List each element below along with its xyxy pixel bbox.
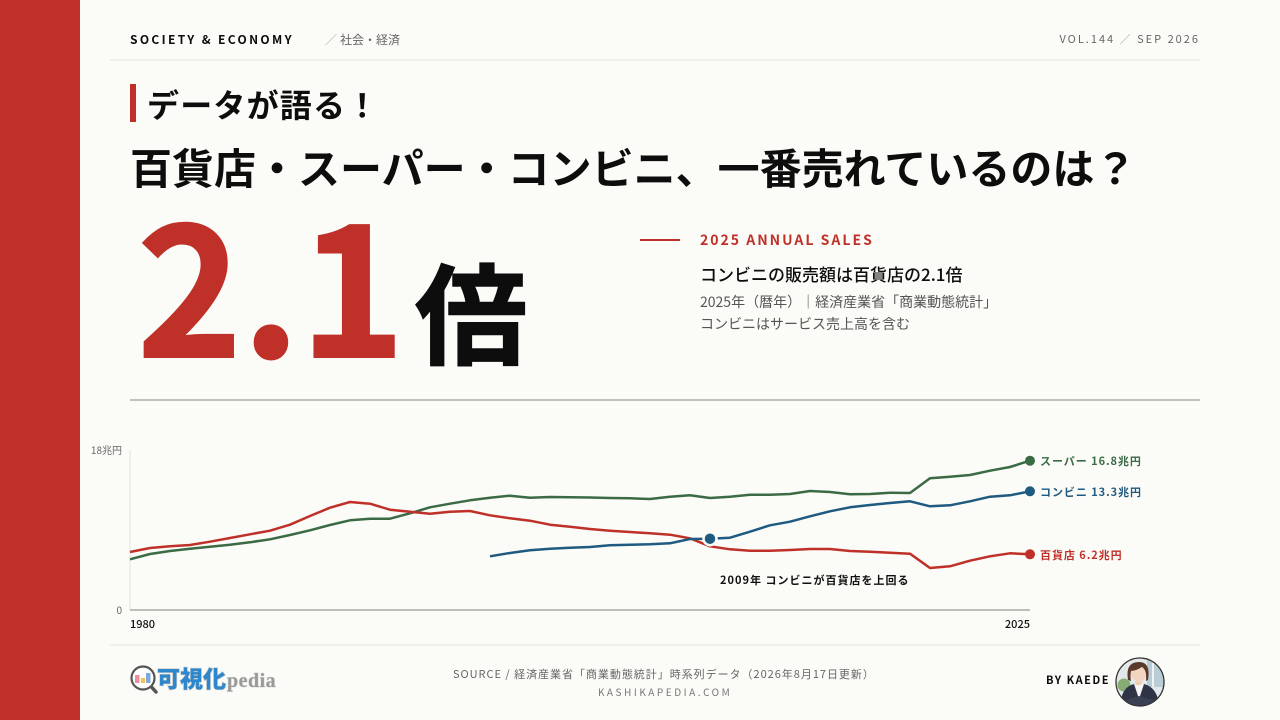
end label supermarket: スーパー 16.8兆円 [1040, 453, 1142, 469]
big number unit: 倍 [415, 231, 527, 388]
logo wordmark kanji: 可視化 [157, 660, 226, 694]
author avatar [1115, 657, 1165, 707]
header category japanese: ／社会・経済 [325, 31, 400, 48]
footer rule [110, 644, 1200, 646]
side headline: コンビニの販売額は百貨店の2.1倍 [700, 261, 962, 286]
logo wordmark latin: pedia [227, 670, 276, 692]
kicker accent bar [130, 84, 136, 122]
2009 annotation: 2009年 コンビニが百貨店を上回る [720, 572, 909, 588]
byline: BY KAEDE [1046, 672, 1110, 688]
section rule [130, 399, 1200, 401]
icon: magnifier with bars [132, 666, 156, 692]
series: convenience store [490, 491, 1030, 556]
main title: 百貨店・スーパー・コンビニ、一番売れているのは？ [130, 136, 1136, 197]
2009 crossover marker [704, 532, 716, 545]
end dot department store [1025, 549, 1035, 559]
end label department store: 百貨店 6.2兆円 [1040, 547, 1123, 563]
line chart [91, 442, 1142, 632]
big number: 2.1 [137, 152, 405, 409]
logo [130, 660, 276, 694]
site url: KASHIKAPEDIA.COM [598, 684, 732, 699]
x label end: 2025 [1005, 616, 1030, 632]
series: department store [130, 502, 1030, 568]
side note line 2: コンビニはサービス売上高を含む [700, 314, 910, 334]
y label zero: 0 [116, 602, 122, 617]
y label top: 18兆円 [91, 442, 122, 457]
side label: 2025 ANNUAL SALES [700, 230, 874, 250]
series: supermarket [130, 461, 1030, 559]
side note line 1: 2025年（暦年）｜経済産業省「商業動態統計」 [700, 292, 997, 312]
left red band [0, 0, 80, 720]
end dot convenience store [1025, 486, 1035, 496]
end label convenience store: コンビニ 13.3兆円 [1040, 484, 1142, 500]
header issue: VOL.144 ／ SEP 2026 [1059, 31, 1200, 47]
x label start: 1980 [130, 616, 155, 632]
source line: SOURCE / 経済産業省「商業動態統計」時系列データ（2026年8月17日更新） [453, 666, 875, 682]
kicker: データが語る！ [147, 81, 379, 127]
y axis [129, 450, 131, 610]
header category: SOCIETY & ECONOMY [130, 31, 294, 48]
header rule [110, 59, 1200, 61]
x axis [130, 609, 1030, 611]
side accent line [640, 239, 680, 241]
end dot supermarket [1025, 456, 1035, 466]
